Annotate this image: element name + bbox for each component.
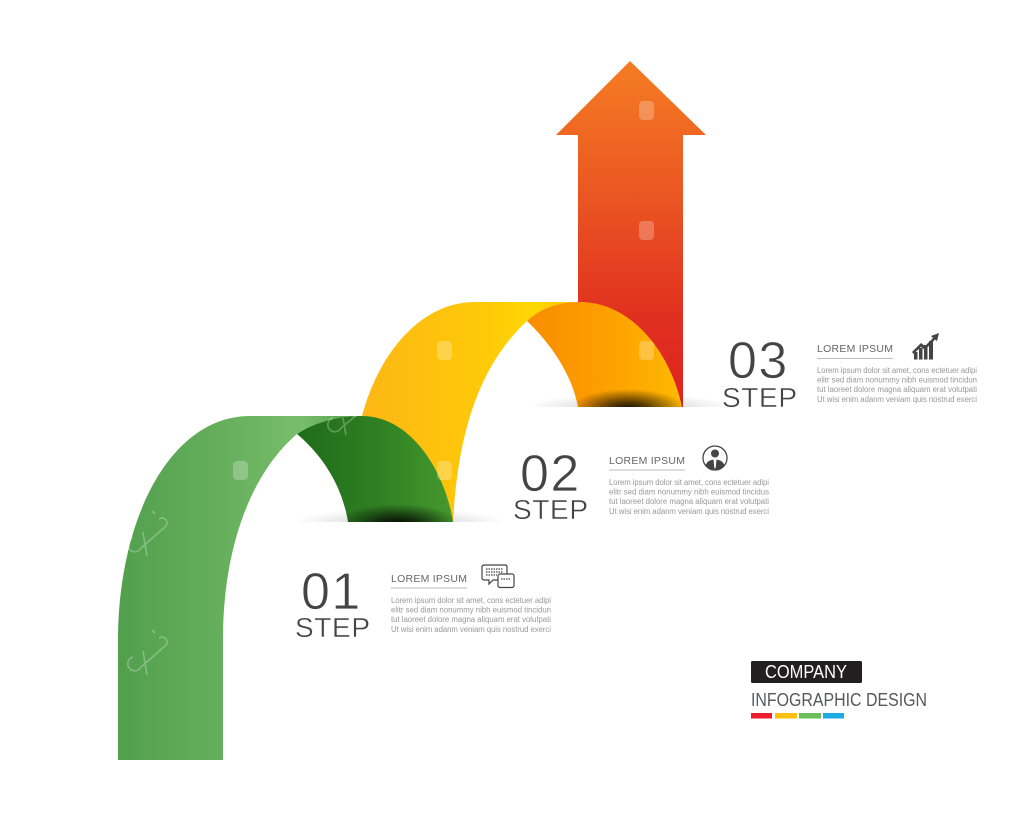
step 1 number: 01 xyxy=(301,563,362,621)
step 2 body text xyxy=(609,478,769,516)
step 1 body text: tut laoreet dolore magna aliquam erat volutpati xyxy=(391,615,551,624)
step 3 number: 03 xyxy=(728,332,789,390)
step 3 body text: elitr sed diam nonummy nibh euismod tincidun xyxy=(817,376,977,384)
step 2 body text: Ut wisi enim adanm veniam quis nostrud exerci xyxy=(609,507,769,516)
ribbon: yellow arch xyxy=(362,302,580,522)
step 1 body text xyxy=(391,596,551,634)
step 1 label: STEP xyxy=(295,612,370,643)
step 1 body text: Lorem ipsum dolor sit amet, cons ectetuer adipi xyxy=(391,596,551,605)
step 2 number: 02 xyxy=(520,445,581,503)
step 3 body text: Lorem ipsum dolor sit amet, cons ectetuer adipi xyxy=(817,366,977,375)
watermarks xyxy=(128,101,654,675)
step 1 xyxy=(295,563,551,643)
floor shadow: step 3 xyxy=(542,398,718,407)
ribbon: dark green fold xyxy=(297,416,453,522)
step 2 body text: tut laoreet dolore magna aliquam erat volutpati xyxy=(609,497,769,506)
step 2 heading: LOREM IPSUM xyxy=(609,455,685,467)
step 3 body text xyxy=(817,366,977,404)
colour legend bars xyxy=(751,713,844,718)
step 3 body text: Ut wisi enim adanm veniam quis nostrud exerci xyxy=(817,395,977,404)
step 1 body text: elitr sed diam nonummy nibh euismod tincidun xyxy=(391,606,551,614)
step 1 body text: Ut wisi enim adanm veniam quis nostrud exerci xyxy=(391,625,551,634)
ribbon: green arch xyxy=(118,416,362,760)
step 3 label: STEP xyxy=(722,382,797,413)
step 1 heading: LOREM IPSUM xyxy=(391,573,467,585)
icon: businessman xyxy=(703,446,727,470)
infographic canvas xyxy=(118,61,976,760)
floor shadow: step 2 xyxy=(312,514,488,522)
icon: growth chart xyxy=(912,333,939,360)
step 3 heading: LOREM IPSUM xyxy=(817,343,893,355)
subtitle: infographic design: INFOGRAPHIC DESIGN xyxy=(751,690,927,710)
step 3 xyxy=(722,332,977,413)
step 2 label: STEP xyxy=(513,494,588,525)
step 2 xyxy=(513,445,769,525)
step 2 body text: elitr sed diam nonummy nibh euismod tincidus xyxy=(609,488,769,496)
icon: chat bubbles xyxy=(482,565,514,588)
step 3 body text: tut laoreet dolore magna aliquam erat volutpati xyxy=(817,385,977,394)
arrow: red-orange upward arrow xyxy=(556,61,706,407)
step 2 body text: Lorem ipsum dolor sit amet, cons ectetuer adipi xyxy=(609,478,769,487)
ribbon: orange fold xyxy=(527,302,682,407)
company badge: COMPANY xyxy=(765,662,847,682)
